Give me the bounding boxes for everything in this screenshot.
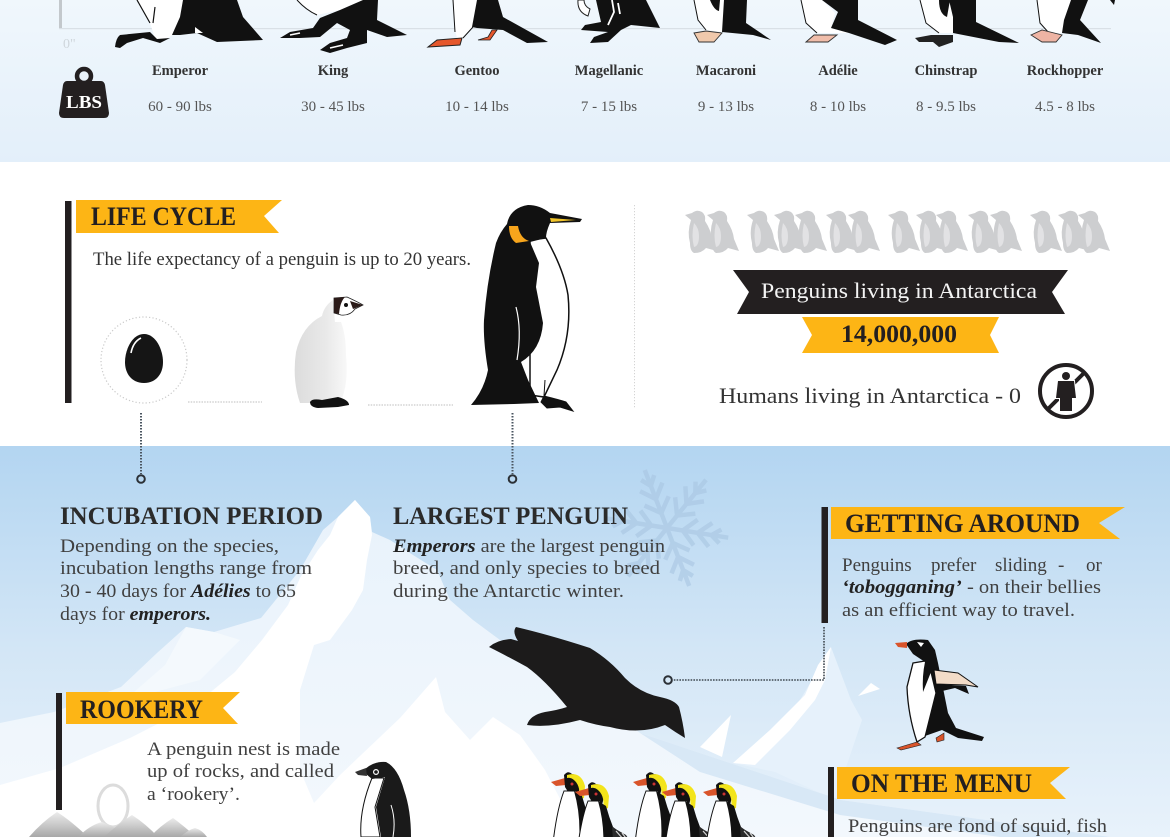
panel: antarctic scene background (0, 446, 1170, 837)
species names: Magellanic (575, 63, 644, 79)
block: largest penguin: LARGEST PENGUIN (393, 503, 628, 530)
species names: Gentoo (454, 63, 500, 79)
penguin: king (280, 0, 407, 53)
connector: getting around (664, 627, 824, 684)
banner: rookery (66, 692, 240, 724)
penguin: rockhopper (1031, 0, 1115, 43)
snowflake (589, 449, 745, 607)
block: largest penguin: breed, and only species to breed (393, 558, 661, 579)
icon: weight LBS (59, 69, 109, 118)
penguin: gentoo (428, 0, 548, 47)
banner: on the menu: ON THE MENU (851, 769, 1032, 798)
penguin: magellanic (578, 0, 660, 43)
icon: weight LBS: LBS (66, 92, 102, 112)
banner: rookery: ROOKERY (80, 695, 203, 724)
penguin: macaroni (694, 0, 771, 42)
text: life expectancy: The life expectancy of a penguin is up to 20 years. (93, 249, 471, 270)
block: getting around: sliding (995, 555, 1047, 576)
ribbon: penguins living in Antarctica (733, 270, 1068, 314)
species weights: 10 - 14 lbs (445, 99, 509, 115)
block: on the menu (828, 767, 1108, 837)
block: rookery (56, 692, 340, 810)
species names: Macaroni (696, 63, 756, 79)
banner: life cycle: LIFE CYCLE (91, 202, 236, 231)
block: on the menu: Penguins are fond of squid, fish (848, 816, 1108, 837)
block: largest penguin (392, 503, 666, 602)
icon: egg (101, 317, 187, 403)
text: humans living in Antarctica: Humans living in Antarctica - 0 (719, 383, 1021, 408)
block: getting around: as an efficient way to travel. (842, 600, 1075, 621)
block: incubation period (60, 503, 323, 625)
species names: Adélie (818, 63, 858, 79)
block: getting around: - (1058, 555, 1064, 576)
species names: Chinstrap (915, 63, 977, 79)
species names: King (318, 63, 349, 79)
species weights (148, 99, 1095, 115)
icon: adult emperor penguin (471, 205, 582, 411)
ribbon: 14,000,000: 14,000,000 (841, 321, 957, 348)
species weights: 8 - 9.5 lbs (916, 99, 976, 115)
block: rookery: a ‘rookery’. (147, 784, 240, 805)
block: rookery: up of rocks, and called (147, 761, 335, 782)
block: incubation period: incubation lengths range from (60, 558, 312, 579)
icon: adelie penguin (355, 762, 411, 837)
panel: life cycle (0, 162, 1170, 446)
panel: species sizes and weights (0, 0, 1170, 162)
block: rookery: A penguin nest is made (147, 739, 340, 760)
icon: no humans (1040, 365, 1092, 417)
icons: rockhopper penguins group (551, 772, 766, 837)
block: largest penguin: Emperors are the largest penguin (392, 536, 666, 557)
banner: life cycle (76, 200, 282, 233)
species weights: 9 - 13 lbs (698, 99, 754, 115)
block: getting around: prefer (931, 555, 977, 576)
species weights: 7 - 15 lbs (581, 99, 637, 115)
penguin: chinstrap (915, 0, 1019, 47)
block: largest penguin: during the Antarctic winter. (393, 581, 624, 602)
species weights: 4.5 - 8 lbs (1035, 99, 1095, 115)
penguin population icons (685, 211, 1110, 253)
penguin: adelie (801, 0, 897, 45)
block: incubation period: 30 - 40 days for Adélies to 65 (60, 581, 296, 602)
block: getting around: Penguins (842, 555, 912, 576)
block: getting around: ‘tobogganing’ - on their bellies (842, 577, 1101, 598)
icon: walking gentoo penguin (895, 640, 984, 750)
species weights: 8 - 10 lbs (810, 99, 866, 115)
mountains (0, 500, 1110, 837)
icon: chick (295, 297, 363, 408)
icon: sliding penguin (489, 627, 685, 738)
icon: rock nest (29, 785, 207, 837)
panel: species sizes and weights: 0" (63, 37, 76, 52)
species weights: 60 - 90 lbs (148, 99, 212, 115)
block: getting around (822, 507, 1125, 623)
block: getting around: or (1086, 555, 1102, 576)
connector: incubation (137, 413, 145, 483)
ribbon: 14,000,000 (802, 317, 999, 353)
connector: largest penguin (509, 413, 516, 483)
species names: Rockhopper (1027, 63, 1104, 79)
species names: Emperor (152, 63, 209, 79)
block: incubation period: days for emperors. (60, 604, 211, 625)
block: incubation period: INCUBATION PERIOD (60, 503, 323, 530)
banner: getting around: GETTING AROUND (845, 509, 1080, 538)
ribbon: penguins living in Antarctica: Penguins living in Antarctica (761, 278, 1037, 303)
block: incubation period: Depending on the species, (60, 536, 279, 557)
species weights: 30 - 45 lbs (301, 99, 365, 115)
penguin: emperor (115, 0, 263, 48)
species names (152, 63, 1104, 79)
